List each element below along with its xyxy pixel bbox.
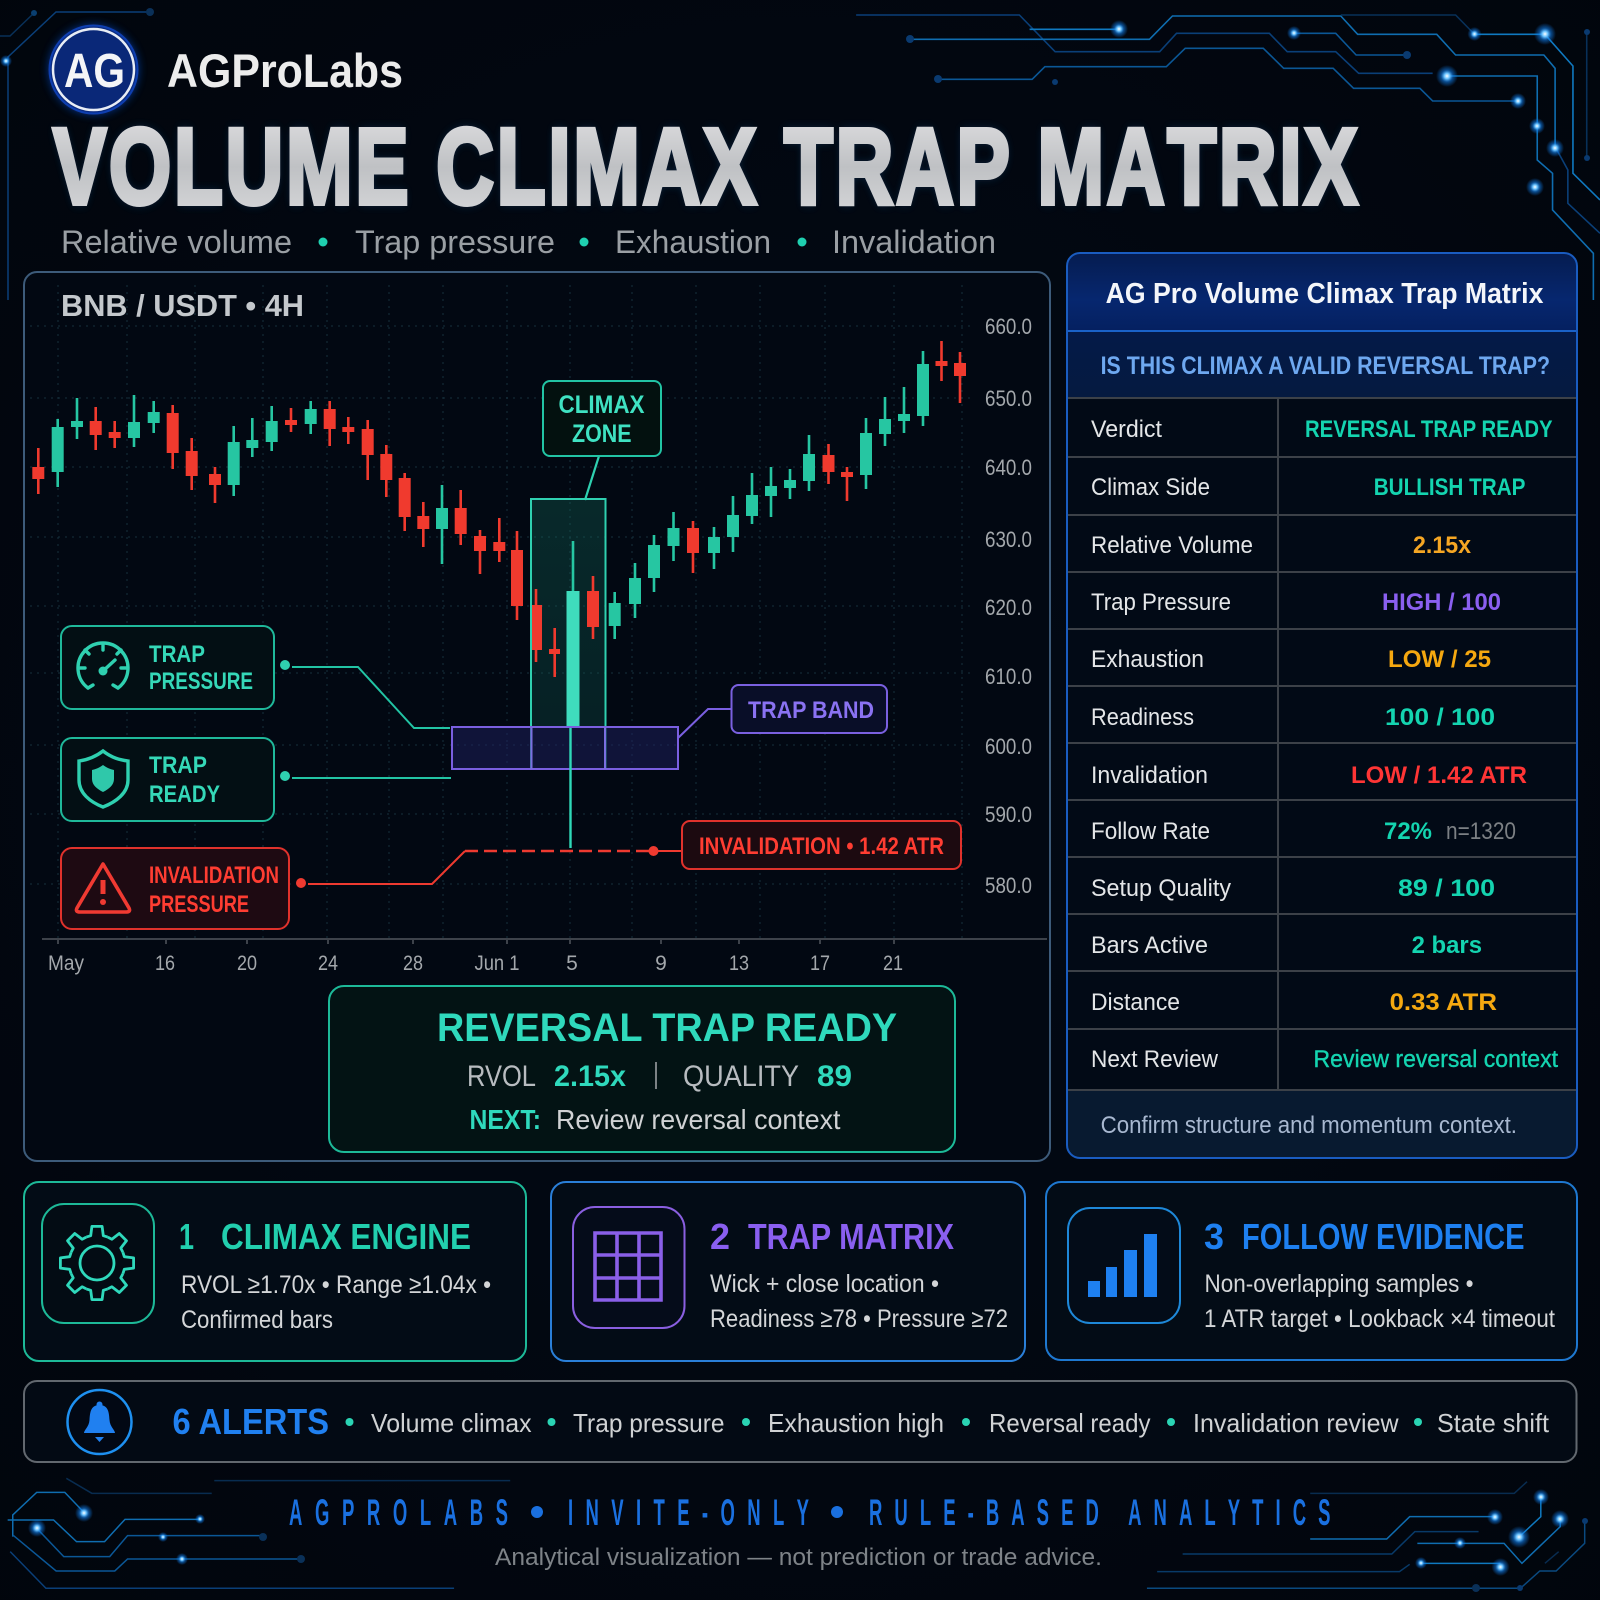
footer tagline: RULE-BASED ANALYTICS: [869, 1493, 1330, 1534]
row: distance: 0.33 ATR: [1390, 989, 1497, 1016]
card: climax engine: RVOL ≥1.70x • Range ≥1.04x •: [181, 1271, 491, 1299]
circuit decoration: bottom right: [1147, 1482, 1588, 1592]
date axis labels: 5: [566, 952, 578, 975]
row: next review: Next Review: [1091, 1046, 1219, 1073]
climax zone callout: ZONE: [572, 420, 632, 448]
circuit decoration: top right: [856, 15, 1600, 300]
alerts bar: Exhaustion high: [768, 1408, 944, 1438]
callout: trap ready: READY: [149, 781, 220, 808]
callout: trap pressure: [61, 626, 450, 728]
row: follow rate: Follow Rate: [1091, 818, 1210, 845]
price axis labels: 580.0: [985, 873, 1032, 898]
climax zone frame: [531, 499, 606, 768]
row: bars active: Bars Active: [1091, 932, 1208, 959]
card: trap matrix: TRAP MATRIX: [748, 1216, 954, 1257]
date axis labels: 17: [810, 952, 830, 975]
price axis labels: [985, 314, 1032, 898]
row: bars active: 2 bars: [1412, 932, 1482, 959]
logo badge: AG: [64, 45, 125, 98]
date axis labels: 13: [729, 952, 749, 975]
row: invalidation: [1091, 762, 1527, 789]
table footer note: Confirm structure and momentum context.: [1101, 1112, 1517, 1139]
row: distance: [1091, 989, 1497, 1016]
alerts bar: Trap pressure: [573, 1408, 724, 1438]
row: trap pressure: [1091, 589, 1501, 616]
circuit decoration: bottom left: [8, 1478, 510, 1588]
trap band callout: [678, 685, 887, 738]
row: invalidation: LOW / 1.42 ATR: [1351, 762, 1527, 789]
footer tagline: AGPROLABS: [289, 1493, 508, 1534]
panel: price chart: [24, 272, 1050, 1161]
row: distance: Distance: [1091, 989, 1180, 1016]
icon: bell: [68, 1390, 132, 1454]
callout: trap ready: [61, 738, 451, 821]
date axis labels: 24: [318, 952, 338, 975]
row: verdict: REVERSAL TRAP READY: [1305, 416, 1553, 443]
row: climax side: BULLISH TRAP: [1374, 474, 1526, 501]
title: VOLUME CLIMAX TRAP MATRIX: [53, 107, 1358, 227]
icon: gauge: [78, 643, 128, 688]
row: climax side: Climax Side: [1091, 474, 1210, 501]
card: follow evidence: 3: [1204, 1216, 1224, 1257]
row: readiness: 100 / 100: [1385, 704, 1495, 731]
verdict box: QUALITY: [683, 1060, 799, 1093]
chart pair heading: BNB / USDT • 4H: [61, 288, 304, 323]
date axis labels: 28: [403, 952, 423, 975]
candlesticks: [32, 341, 966, 728]
title: VOLUME CLIMAX TRAP MATRIX: [53, 107, 1358, 227]
subtitle: Invalidation: [832, 224, 996, 260]
card: follow evidence: FOLLOW EVIDENCE: [1242, 1216, 1524, 1257]
row: trap pressure: HIGH / 100: [1382, 589, 1501, 616]
panel: decision matrix table: [1067, 253, 1577, 1158]
card: follow evidence: 1 ATR target • Lookback ×4 timeout: [1204, 1305, 1555, 1333]
alerts bar: State shift: [1437, 1408, 1550, 1438]
invalidation callout: [296, 821, 961, 888]
brand name: AGProLabs: [167, 44, 403, 97]
callout: invalidation pressure: [61, 848, 289, 929]
icon: warning triangle: [76, 864, 130, 912]
row: setup quality: [1091, 875, 1495, 902]
callout: trap pressure: TRAP: [149, 641, 205, 668]
trap band: [452, 727, 678, 769]
date axis labels: Jun 1: [474, 952, 520, 975]
row: readiness: Readiness: [1091, 704, 1194, 731]
circuit decoration: top left: [0, 8, 154, 300]
card: trap matrix: Readiness ≥78 • Pressure ≥72: [710, 1305, 1008, 1333]
row: readiness: [1091, 704, 1495, 731]
icon: shield: [79, 751, 128, 807]
callout: trap pressure: PRESSURE: [149, 668, 253, 695]
date axis labels: 16: [155, 952, 175, 975]
row: relative volume: 2.15x: [1413, 532, 1472, 559]
row: verdict: Verdict: [1091, 416, 1162, 443]
alerts bar: 6 ALERTS: [172, 1401, 329, 1442]
callout: trap ready: TRAP: [149, 752, 207, 779]
alerts bar: Invalidation review: [1193, 1408, 1399, 1438]
icon: gear: [42, 1204, 154, 1323]
disclaimer: Analytical visualization — not prediction or trade advice.: [495, 1544, 1102, 1571]
table question: [1067, 331, 1577, 398]
alerts bar: Volume climax: [371, 1408, 532, 1438]
icon: signal bars: [1068, 1208, 1180, 1323]
date axis labels: [48, 952, 903, 975]
verdict box: NEXT:: [470, 1104, 541, 1135]
climax zone highlight: [531, 499, 606, 727]
card: climax engine: 1: [179, 1216, 194, 1257]
row: follow rate: n=1320: [1446, 818, 1516, 845]
climax zone callout: [543, 381, 661, 500]
card: climax engine: Confirmed bars: [181, 1306, 333, 1334]
verdict box: REVERSAL TRAP READY: [437, 1006, 897, 1050]
subtitle: Exhaustion: [615, 224, 771, 260]
verdict box: 89: [817, 1060, 852, 1093]
price axis labels: 600.0: [985, 734, 1032, 759]
climax zone callout: CLIMAX: [558, 391, 645, 419]
icon: grid: [573, 1207, 684, 1328]
price axis labels: 640.0: [985, 455, 1032, 480]
verdict box: [329, 986, 955, 1152]
date axis labels: 21: [883, 952, 903, 975]
row: exhaustion: [1091, 646, 1491, 673]
row: exhaustion: Exhaustion: [1091, 646, 1204, 673]
card: follow evidence: Non-overlapping samples •: [1204, 1270, 1474, 1298]
row: trap pressure: Trap Pressure: [1091, 589, 1231, 616]
date axis labels: May: [48, 952, 84, 975]
footer tagline: [289, 1493, 1330, 1534]
price axis labels: 590.0: [985, 802, 1032, 827]
date axis labels: 9: [655, 952, 667, 975]
subtitle: [61, 224, 996, 260]
price axis labels: 620.0: [985, 595, 1032, 620]
callout: invalidation pressure: INVALIDATION: [149, 862, 279, 889]
trap band callout: TRAP BAND: [748, 697, 874, 724]
row: verdict: [1091, 416, 1553, 443]
table rows: [1091, 416, 1558, 1073]
lower wick of climax candle: [569, 728, 572, 848]
subtitle: Trap pressure: [355, 224, 555, 260]
callout: invalidation pressure: PRESSURE: [149, 891, 249, 918]
row: setup quality: 89 / 100: [1398, 875, 1495, 902]
footer tagline: INVITE-ONLY: [568, 1493, 809, 1534]
card: trap matrix: Wick + close location •: [710, 1270, 939, 1298]
row: exhaustion: LOW / 25: [1388, 646, 1491, 673]
row: invalidation: Invalidation: [1091, 762, 1208, 789]
card: trap matrix: [551, 1182, 1025, 1361]
subtitle: Relative volume: [61, 224, 292, 260]
price axis labels: 610.0: [985, 664, 1032, 689]
invalidation callout: INVALIDATION • 1.42 ATR: [699, 833, 944, 860]
row: relative volume: Relative Volume: [1091, 532, 1253, 559]
card: climax engine: [24, 1182, 526, 1361]
row: follow rate: [1091, 818, 1516, 845]
alerts bar: [24, 1381, 1576, 1462]
date axis labels: 20: [237, 952, 257, 975]
verdict box: 2.15x: [554, 1060, 626, 1093]
card: climax engine: CLIMAX ENGINE: [221, 1216, 471, 1257]
card: follow evidence: [1046, 1182, 1577, 1360]
row: bars active: [1091, 932, 1482, 959]
row: next review: Review reversal context: [1314, 1046, 1558, 1073]
row: climax side: [1091, 474, 1526, 501]
price axis labels: 630.0: [985, 527, 1032, 552]
verdict box: Review reversal context: [556, 1104, 841, 1135]
table header: AG Pro Volume Climax Trap Matrix: [1106, 278, 1543, 310]
row: setup quality: Setup Quality: [1091, 875, 1231, 902]
price axis labels: 650.0: [985, 386, 1032, 411]
row: next review: [1091, 1046, 1558, 1073]
price axis labels: 660.0: [985, 314, 1032, 339]
row: relative volume: [1091, 532, 1472, 559]
card: trap matrix: 2: [710, 1216, 730, 1257]
verdict box: RVOL: [467, 1060, 536, 1093]
table header: [1067, 253, 1577, 331]
row: follow rate: 72%: [1384, 818, 1432, 845]
logo badge: [48, 24, 140, 116]
alerts bar: Reversal ready: [989, 1408, 1150, 1438]
